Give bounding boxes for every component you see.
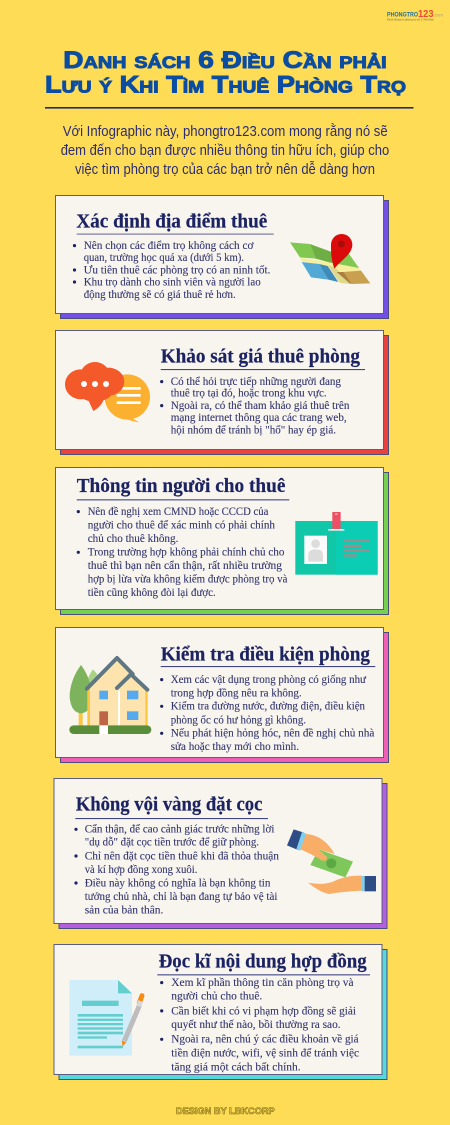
footer credit: DESIGN BY LBKCORP [176,1106,275,1116]
bullet list: hội nhóm để tránh bị "hố" hay ép giá. [171,422,336,436]
icon: chat bubbles [65,362,150,422]
icon: document and pen [69,980,142,1056]
logo: PHONGTRO [387,12,418,18]
bullet list: mạng internet thông qua các trang web, [171,410,347,424]
panel: xác định địa điểm thuê [56,196,388,318]
bullet list: hợp bị lừa vừa không kiếm được phòng trọ và [88,571,288,585]
bullet list: tăng giá một cách bất chính. [171,1059,301,1073]
bullet list: Kiểm tra đường nước, đường điện, điều kiện [171,699,365,713]
intro text: việc tìm phòng trọ của các bạn trở nên dễ dàng hơn [75,161,375,178]
bullet list [77,504,288,599]
bullet list: chủ cho thuê không. [88,531,178,545]
panel: thông tin người cho thuê [56,468,388,614]
logo [387,8,443,22]
title [45,47,406,99]
bullet list: Cần biết khi có vi phạm hợp đồng sẽ giải [171,1003,357,1017]
panel: đọc kĩ nội dung hợp đồng [54,944,387,1080]
bullet list: và kí hợp đồng xong xuôi. [85,862,197,876]
bullet list: Trong trường hợp không phải chính chủ cho [88,545,284,559]
icon: hands exchanging money [287,829,376,894]
bullet list [160,975,359,1073]
bullet list: Nên chọn các điểm trọ không cách cơ [84,238,254,252]
bullet list: "dụ dỗ" đặt cọc tiền trước để giữ phòng. [85,835,259,849]
bullet list: trong hợp đồng nêu ra không. [171,685,302,699]
heading: Đọc kĩ nội dung hợp đồng [159,951,367,972]
bullet list: sửa hoặc thay mới cho mình. [171,739,299,753]
heading: Thông tin người cho thuê [77,476,286,497]
intro text [61,123,389,178]
heading: Không vội vàng đặt cọc [76,795,263,816]
bullet list: động thường sẽ có giá thuê rẻ hơn. [84,287,236,301]
bullet list [73,238,270,301]
bullet list: Ưu tiên thuê các phòng trọ có an ninh tốt. [84,262,270,276]
icon: map with pin [290,234,370,284]
bullet list [160,672,375,753]
heading: Kiểm tra điều kiện phòng [161,644,370,665]
bullet list [160,374,349,436]
icon: id card [295,512,378,575]
bullet list: Cẩn thận, để cao cảnh giác trước những lời [85,822,275,836]
bullet list: người chủ cho thuê. [171,989,262,1003]
panel: không vội vàng đặt cọc [54,778,387,928]
title: Danh sách 6 Điều Cần phải [63,47,387,74]
bullet list: sản của bản thân. [85,903,163,917]
bullet list: Xem các vật dụng trong phòng có giống như [171,672,366,686]
icon: house [69,658,151,734]
bullet list: tiền cũng không đòi lại được. [88,585,216,599]
bullet list: Chỉ nên đặt cọc tiền thuê khi đã thỏa thuận [85,848,279,862]
bullet list: Ngoài ra, nên chú ý các điều khoản về giá [171,1032,359,1046]
panel: khảo sát giá thuê phòng [56,330,388,454]
bullet list: Ngoài ra, có thể tham khảo giá thuê trên [171,398,349,412]
logo: Kênh thông tin phòng trọ số 1 Việt Nam [387,18,435,22]
bullet list: Nên đề nghị xem CMND hoặc CCCD của [88,504,269,518]
intro text: Với Infographic này, phongtro123.com mong rằng nó sẽ [63,123,388,140]
bullet list: quyết như thế nào, bồi thường ra sao. [171,1017,341,1031]
bullet list: Xem kĩ phần thông tin căn phòng trọ và [171,975,354,989]
panel: kiểm tra điều kiện phòng [56,628,388,762]
bullet list: thuê trọ tại đó, hoặc trong khu vực. [171,386,327,400]
heading: Khảo sát giá thuê phòng [161,347,360,368]
intro text: đem đến cho bạn được nhiều thông tin hữu ích, giúp cho [61,142,389,159]
title: Lưu ý Khi Tìm Thuê Phòng Trọ [45,72,406,99]
bullet list: Khu trọ dành cho sinh viên và người lao [84,274,261,288]
bullet list: Nếu phát hiện hỏng hóc, nên đề nghị chủ nhà [171,726,375,740]
bullet list: người cho thuê để xác minh có phải chính [88,517,275,531]
logo: .com [434,12,443,18]
bullet list: quan, trường học quá xa (dưới 5 km). [84,250,244,264]
bullet list: thuê thì bạn nên cẩn thận, rất nhiều trường [88,558,282,572]
bullet list [74,822,279,917]
bullet list: tưởng chủ nhà, chỉ là bạn đang tự bảo vệ tài [85,889,278,903]
bullet list: tiền điện nước, wifi, vệ sinh để tránh việc [171,1045,359,1059]
logo: 123 [418,8,434,20]
bullet list: Có thể hỏi trực tiếp những người đang [171,374,341,388]
bullet list: Điều này không có nghĩa là bạn không tin [85,875,270,889]
heading: Xác định địa điểm thuê [76,211,268,232]
bullet list: phòng ốc có hư hỏng gì không. [171,712,306,726]
